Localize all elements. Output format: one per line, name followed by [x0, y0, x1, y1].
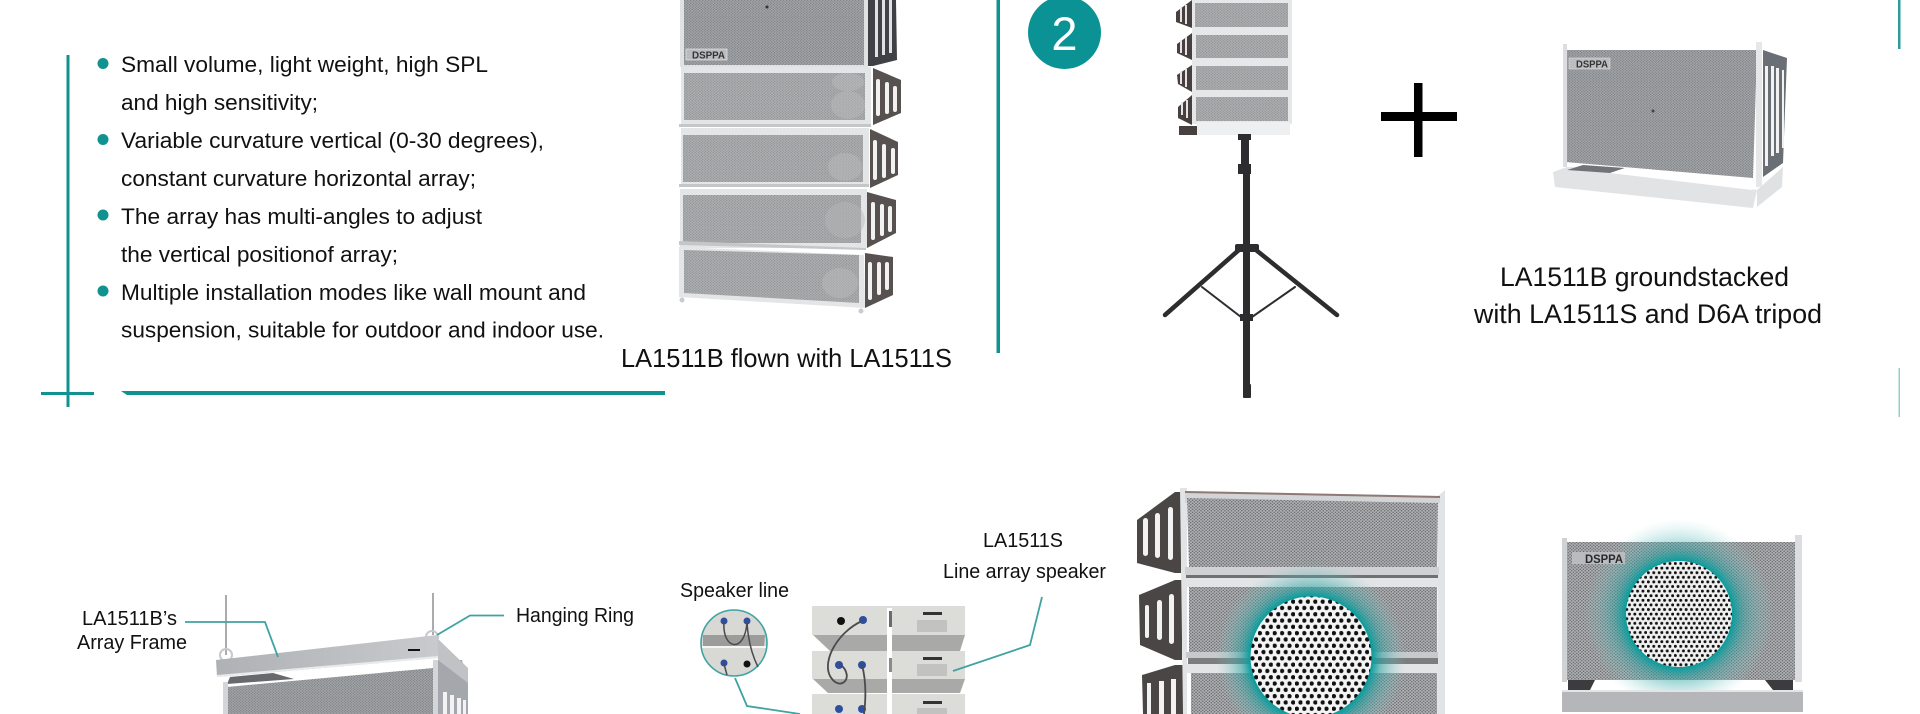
callout: array frame: LA1511B’s: [82, 608, 177, 630]
image: LA1511B flown array: [679, 0, 901, 314]
label: speaker line: [680, 580, 800, 714]
caption: groundstacked: LA1511B groundstacked: [1500, 262, 1789, 292]
callout: array frame: [77, 608, 278, 657]
callout: hanging ring: Hanging Ring: [516, 605, 634, 627]
bullet list: and high sensitivity;: [121, 90, 318, 115]
panel: feature list: [41, 52, 665, 407]
bullet list: Variable curvature vertical (0-30 degrees),: [121, 128, 544, 153]
bullet list: the vertical positionof array;: [121, 242, 398, 267]
bullet list: [98, 52, 604, 342]
badge: number 2: [1028, 0, 1101, 69]
badge: number 2: 2: [1051, 7, 1078, 60]
caption: groundstacked: [1473, 262, 1822, 329]
bullet list: Multiple installation modes like wall mount and: [121, 280, 586, 305]
divider line: [996, 0, 1000, 353]
image: speaker front with highlighted driver: [1562, 510, 1803, 712]
image: speaker front with highlighted driver: DSPPA: [1585, 552, 1623, 566]
callout: line array speaker: Line array speaker: [943, 561, 1106, 583]
bullet list: The array has multi-angles to adjust: [121, 204, 483, 229]
image: LA1511B flown array: DSPPA: [692, 50, 725, 62]
bullet list: constant curvature horizontal array;: [121, 166, 476, 191]
image: array on tripod: [1165, 0, 1337, 398]
callout: line array speaker: [943, 530, 1106, 671]
frame lines: feature list: [41, 55, 665, 407]
callout: line array speaker: LA1511S: [983, 530, 1063, 552]
caption: LA1511B flown: LA1511B flown with LA1511S: [621, 343, 952, 373]
callout: hanging ring: [437, 605, 634, 635]
image: rear speaker connections: [812, 606, 965, 714]
image: array frame speaker: [216, 593, 468, 714]
image: LA1511B groundstacked: [1553, 42, 1787, 208]
inset: speaker line detail: [701, 610, 767, 676]
callout: array frame: Array Frame: [77, 632, 187, 654]
image: speaker array with highlighted driver: [1137, 488, 1446, 714]
label: speaker line: Speaker line: [680, 580, 789, 602]
bullet list: suspension, suitable for outdoor and indoor use.: [121, 318, 604, 342]
image: LA1511B groundstacked: DSPPA: [1576, 58, 1608, 70]
caption: groundstacked: with LA1511S and D6A tripod: [1473, 299, 1822, 329]
edge accent lines: [1898, 0, 1900, 417]
bullet list: Small volume, light weight, high SPL: [121, 52, 488, 77]
icon: plus sign: [1381, 83, 1457, 157]
